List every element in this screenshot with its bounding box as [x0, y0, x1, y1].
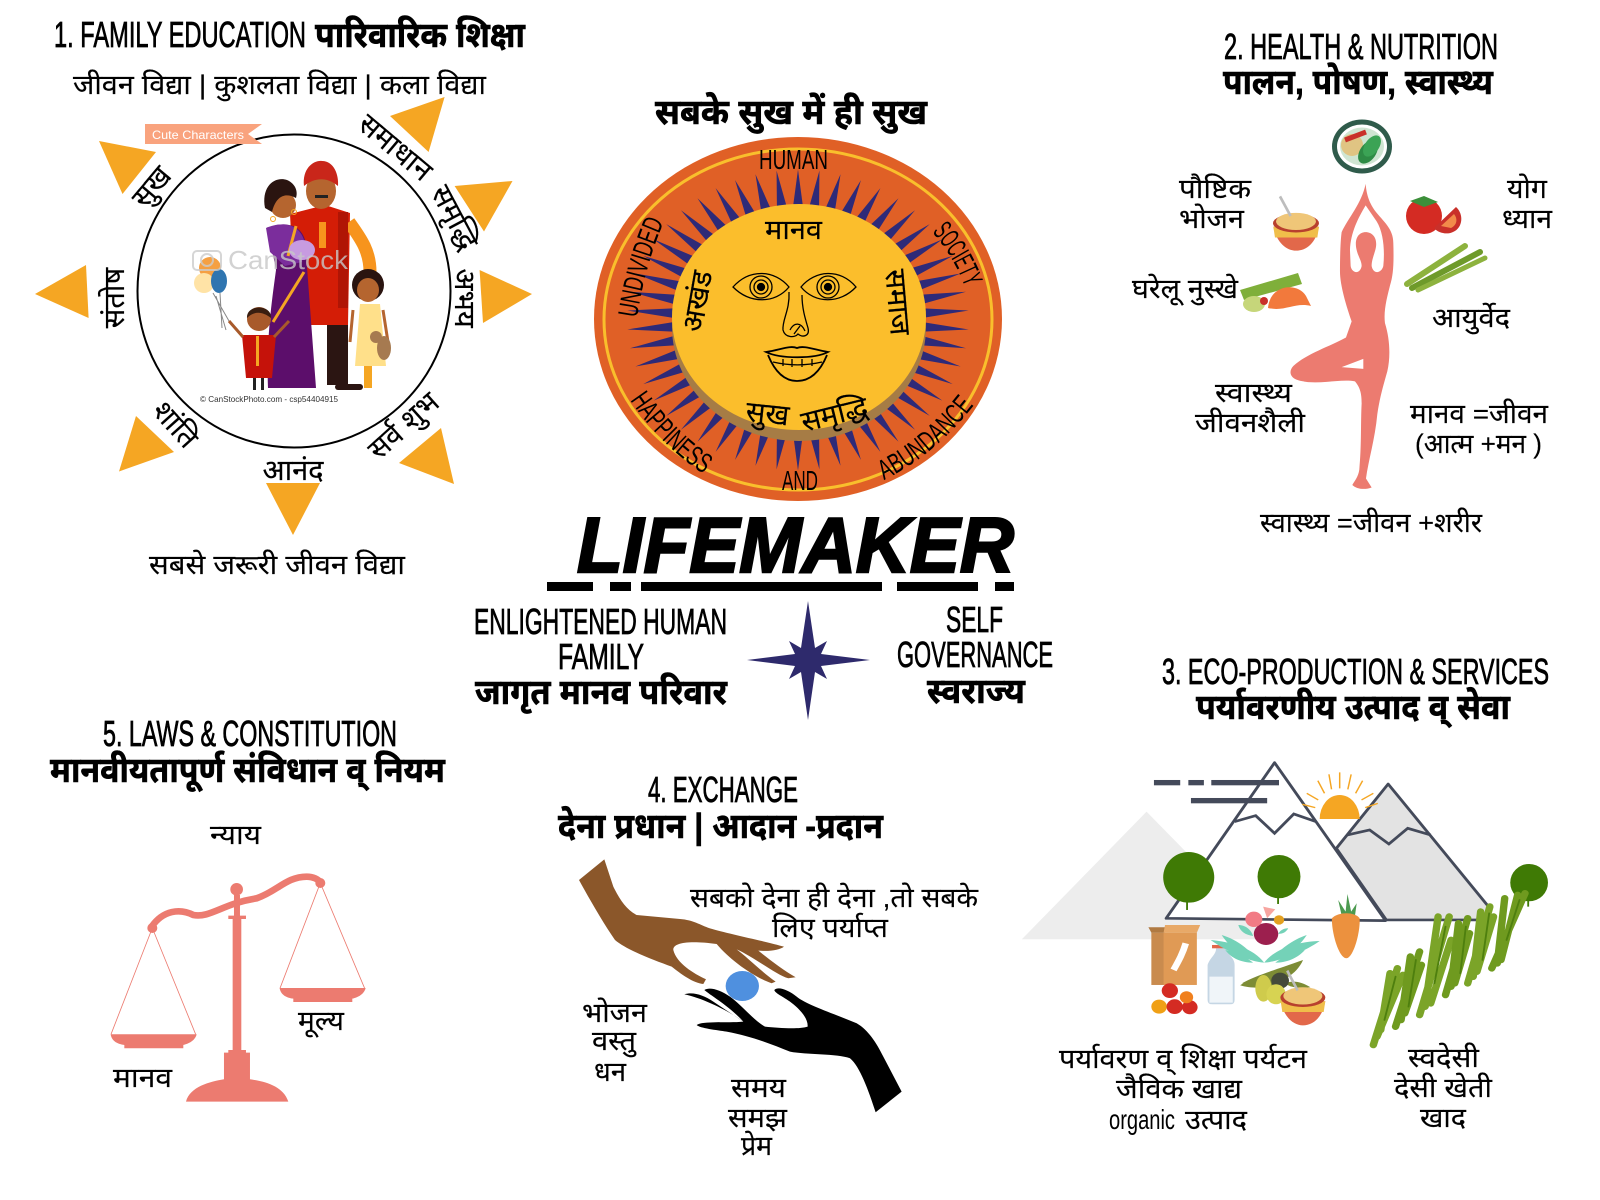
yellow ring — [604, 149, 992, 490]
sun shadow — [672, 213, 926, 441]
text block: enlightened human family: ENLIGHTENED HUMAN — [474, 601, 727, 642]
label: human: मानव — [113, 1063, 173, 1093]
label: value: मूल्य — [298, 1006, 345, 1038]
icon: food bowl — [1273, 196, 1319, 251]
sun hindi words: मानव — [765, 215, 823, 245]
ring texts: HUMAN — [759, 144, 828, 175]
caption: indigenous farming: खाद — [1420, 1103, 1467, 1133]
value labels around the circle: समाधान — [352, 108, 439, 189]
icon: salmon and asparagus — [1240, 273, 1311, 312]
panel: eco-production and services — [1022, 651, 1549, 1135]
value labels around the circle: समृद्धि — [423, 180, 485, 256]
heading hindi: पालन, पोषण, स्वास्थ्य — [1223, 62, 1494, 102]
icon: navy compass star — [747, 601, 870, 720]
figure: yoga tree pose — [1291, 184, 1394, 489]
panel: health and nutrition — [1132, 26, 1553, 538]
banner: cute characters: Cute Characters — [152, 128, 244, 142]
text: giving statement: लिए पर्याप्त — [772, 912, 889, 943]
circle — [138, 134, 450, 448]
text block: self governance: SELF — [946, 599, 1003, 640]
icon: asparagus — [1407, 246, 1485, 290]
caption: eco tourism and organic: organic — [1109, 1104, 1175, 1135]
sun — [672, 204, 926, 430]
illustration: organic food — [1148, 894, 1360, 1014]
logo: LIFEMAKER — [547, 501, 1014, 591]
caption: eco tourism and organic: उत्पाद — [1185, 1105, 1248, 1135]
text block: self governance — [897, 599, 1053, 711]
illustration: mountains and sun — [1022, 763, 1548, 939]
text: intangible things: समय — [731, 1073, 787, 1103]
text: intangible things — [728, 1073, 788, 1161]
herb and health labels: घरेलू नुस्खे — [1132, 273, 1239, 306]
caption: सबसे जरूरी जीवन विद्या — [149, 549, 406, 580]
heading hindi: देना प्रधान | आदान -प्रदान — [558, 806, 884, 846]
caption: eco tourism and organic — [1059, 1043, 1308, 1135]
orange triangles — [35, 97, 532, 535]
text: giving statement: सबको देना ही देना ,तो सबके — [690, 882, 979, 913]
herb and health labels: आयुर्वेद — [1432, 302, 1511, 335]
banner: cute characters — [145, 124, 262, 144]
text: material things: वस्तु — [592, 1026, 637, 1058]
ring texts: UNDIVIDED — [618, 218, 662, 316]
value labels around the circle: शांति — [146, 395, 205, 455]
ring texts: SOCIETY — [934, 222, 983, 284]
text block: enlightened human family: FAMILY — [558, 636, 644, 677]
herb and health labels — [1132, 174, 1553, 538]
subtitle: जीवन विद्या | कुशलता विद्या | कला विद्या — [73, 70, 487, 102]
watermark: CanStock — [228, 245, 349, 275]
heading: happiness motto: सबके सुख में ही सुख — [655, 92, 928, 134]
illustration: balance scale — [111, 877, 366, 1102]
label: justice: न्याय — [210, 820, 262, 850]
value labels around the circle: आनंद — [262, 455, 324, 487]
text block: self governance: GOVERNANCE — [897, 634, 1053, 675]
caption: eco tourism and organic: पर्यावरण व् शिक्षा पर्यटन — [1059, 1043, 1308, 1076]
sun hindi words: समाज — [878, 268, 916, 337]
panel: laws and constitution — [50, 713, 446, 1102]
text: intangible things: प्रेम — [741, 1130, 773, 1161]
panel: central sun emblem — [594, 92, 1002, 501]
text: giving statement — [690, 882, 979, 943]
illustration: asparagus rows — [1373, 893, 1525, 1045]
herb and health labels: मानव =जीवन — [1410, 399, 1549, 429]
text: material things — [582, 998, 648, 1087]
value labels around the circle: सर्व शुभ — [361, 385, 447, 467]
rays — [627, 170, 969, 470]
panel: family education — [35, 14, 532, 580]
text block: enlightened human family: जागृत मानव परिवार — [475, 672, 728, 714]
herb and health labels: स्वास्थ्य =जीवन +शरीर — [1260, 508, 1483, 538]
caption: indigenous farming — [1394, 1042, 1493, 1133]
caption: indigenous farming: देसी खेती — [1394, 1072, 1493, 1103]
heading hindi: पर्यावरणीय उत्पाद व् सेवा — [1196, 687, 1511, 728]
value labels around the circle: संतोष — [98, 267, 131, 328]
sun hindi words: समृद्धि — [798, 390, 872, 440]
text: intangible things: समझ — [728, 1103, 788, 1133]
outer disc — [594, 137, 1002, 501]
heading: laws: 5. LAWS & CONSTITUTION — [103, 713, 397, 754]
text: material things: भोजन — [582, 998, 648, 1028]
caption: indigenous farming: स्वदेसी — [1408, 1042, 1480, 1073]
herb and health labels: ध्यान — [1502, 204, 1553, 234]
value labels around the circle: सुख — [126, 159, 180, 215]
sun hindi words — [677, 215, 916, 440]
sun hindi words: सुख — [744, 396, 792, 434]
text block: self governance: स्वराज्य — [927, 672, 1026, 711]
herb and health labels: स्वास्थ्य — [1215, 378, 1293, 408]
caption: eco tourism and organic: जैविक खाद्य — [1116, 1073, 1243, 1104]
illustration: giving and receiving hands — [579, 859, 902, 1112]
dashed underline — [547, 582, 1014, 591]
heading: exchange: 4. EXCHANGE — [648, 769, 798, 810]
wordmark: LIFEMAKER — [577, 501, 1014, 589]
panel: exchange — [558, 769, 979, 1161]
icon: tomato — [1406, 196, 1461, 234]
herb and health labels: योग — [1507, 174, 1548, 204]
ring texts: HAPPINESS — [630, 390, 712, 472]
herb and health labels: जीवनशैली — [1195, 407, 1306, 438]
herb and health labels: पौष्टिक — [1179, 174, 1252, 204]
ring texts — [618, 144, 983, 496]
value labels around the circle: अभय — [448, 268, 480, 329]
icon: plate — [1332, 120, 1392, 174]
illustration: family — [194, 161, 391, 390]
heading: family education hindi: पारिवारिक शिक्षा — [315, 15, 526, 55]
photo credit: © CanStockPhoto.com - csp54404915 — [200, 394, 338, 404]
sun hindi words: अखंड — [677, 268, 719, 334]
icon: bowl in food group — [1280, 971, 1325, 1025]
ring texts: ABUNDANCE — [880, 394, 974, 480]
face — [733, 273, 856, 381]
heading: family education: 1. FAMILY EDUCATION — [54, 14, 306, 55]
text block: enlightened human family — [474, 601, 728, 714]
heading hindi: मानवीयतापूर्ण संविधान व् नियम — [50, 750, 446, 792]
text: material things: धन — [594, 1057, 627, 1087]
value labels around the circle — [98, 108, 485, 487]
herb and health labels: भोजन — [1179, 204, 1245, 234]
ring texts: AND — [782, 465, 818, 496]
herb and health labels: (आत्म +मन ) — [1415, 429, 1542, 459]
